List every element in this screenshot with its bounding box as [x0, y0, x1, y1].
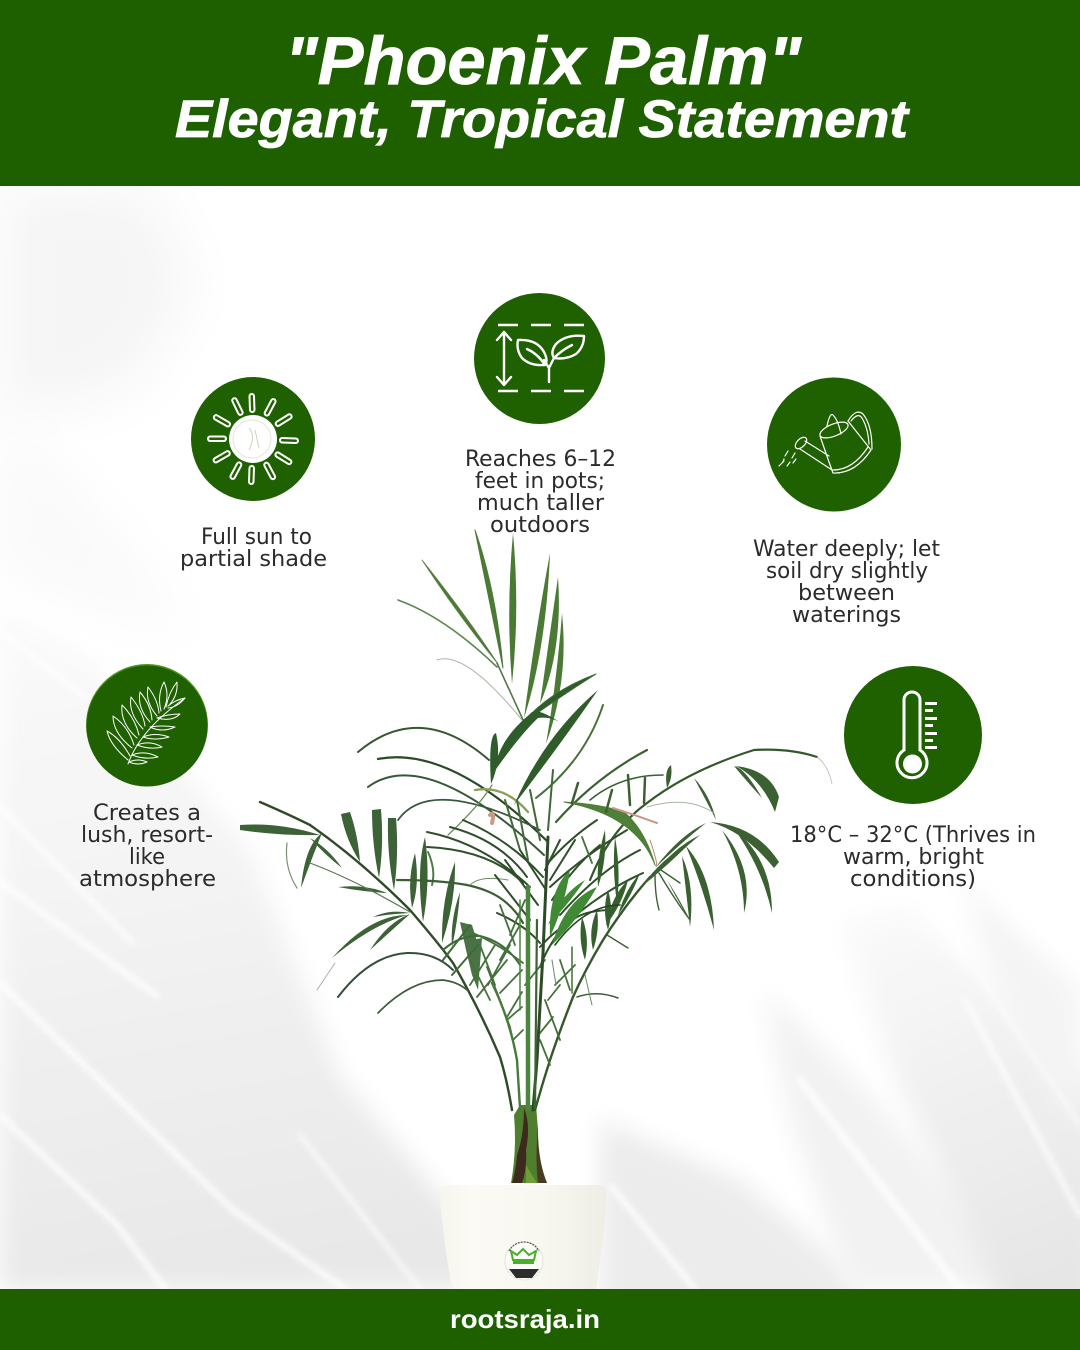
icon: palm leaf [86, 664, 208, 786]
panel: watering [753, 378, 940, 628]
plant: phoenix palm [240, 530, 832, 1183]
footer website text: rootsraja.in [450, 1304, 600, 1334]
text: temperature [790, 823, 1036, 892]
text: atmosphere [79, 801, 216, 892]
panel: temperature [790, 666, 1036, 892]
text: height: feet in pots; [475, 469, 605, 494]
right frond [535, 750, 832, 1110]
text: sunlight [180, 525, 327, 572]
panel: height [465, 293, 616, 538]
text: height: much taller [477, 491, 605, 516]
icon: sun [191, 377, 315, 501]
text: atmosphere: lush, resort- [81, 823, 213, 848]
footer band [0, 1289, 1080, 1350]
text: watering: between [798, 581, 895, 606]
text: sunlight: Full sun to [201, 525, 312, 550]
header band [0, 0, 1080, 186]
central criss-cross fronds [427, 820, 643, 1110]
icon: thermometer [844, 666, 982, 804]
text: temperature: 18°C – 32°C (Thrives in [790, 823, 1036, 848]
icon: height with seedling [474, 293, 605, 424]
title: "Phoenix Palm" [285, 23, 802, 99]
text: watering: Water deeply; let [753, 537, 940, 562]
text: atmosphere: like [129, 845, 165, 870]
text: sunlight: partial shade [180, 547, 327, 572]
icon: watering can [767, 378, 901, 512]
text: temperature: conditions) [850, 867, 976, 892]
text: watering: waterings [792, 603, 901, 628]
panel: sunlight [180, 377, 327, 572]
text: watering [753, 537, 940, 628]
left frond [240, 802, 523, 1110]
upper middle leaflets [358, 674, 647, 860]
text: height: outdoors [490, 513, 590, 538]
text: temperature: warm, bright [843, 845, 984, 870]
subtitle: Elegant, Tropical Statement [175, 90, 910, 149]
top frond [398, 530, 564, 744]
pot logo badge [505, 1242, 543, 1280]
text: atmosphere: atmosphere [79, 867, 216, 892]
pot [440, 1185, 606, 1289]
text: watering: soil dry slightly [766, 559, 928, 584]
text: atmosphere: Creates a [93, 801, 201, 826]
text: height: Reaches 6–12 [465, 447, 616, 472]
text: height [465, 447, 616, 538]
panel: atmosphere [79, 664, 216, 892]
trunk base [511, 1105, 547, 1183]
